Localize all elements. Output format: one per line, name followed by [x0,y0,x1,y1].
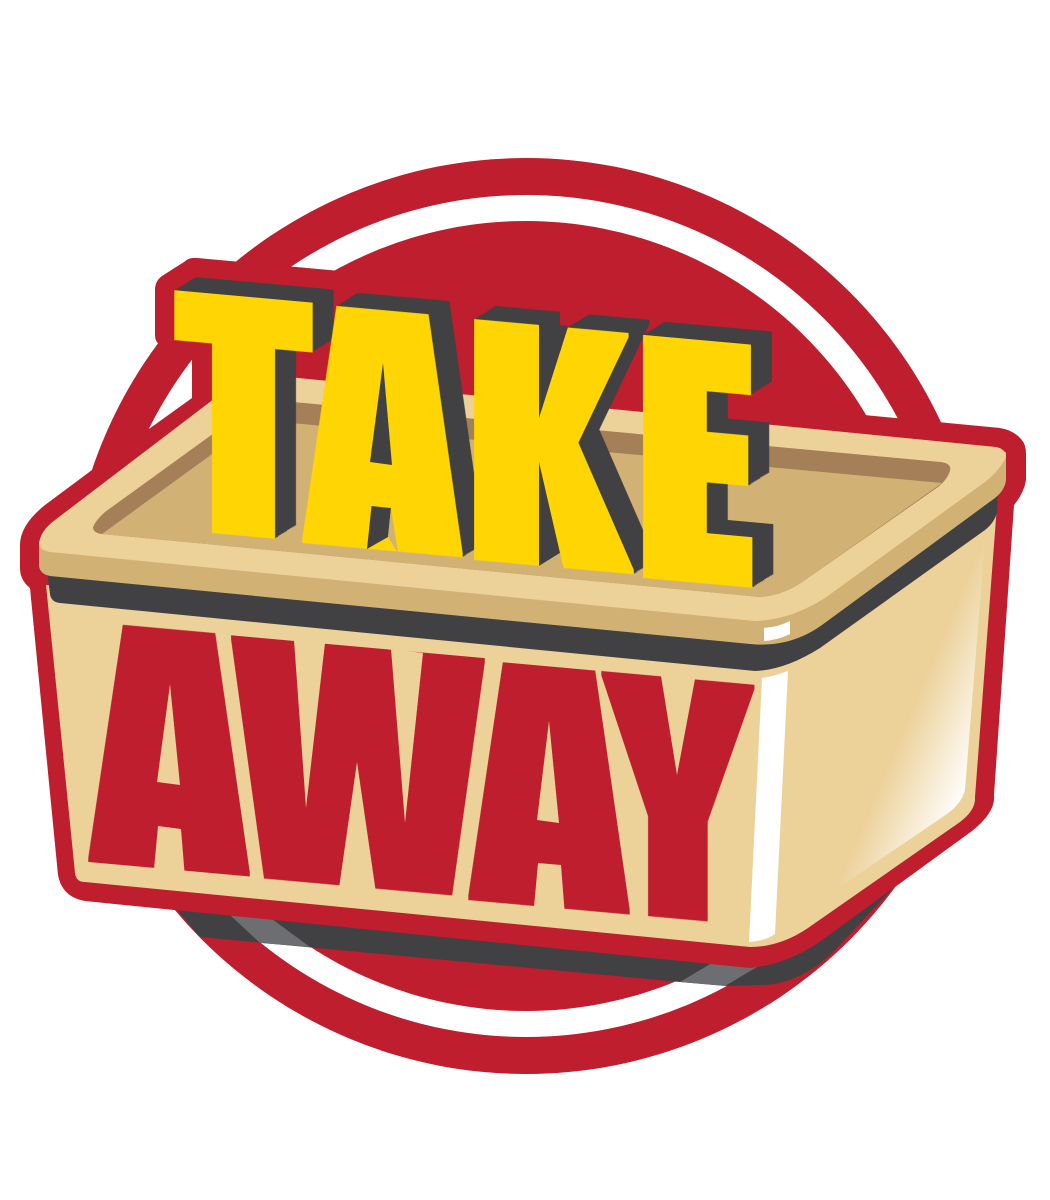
word: TAKE: T [190,230,297,615]
box lid [39,373,1006,645]
take away logo [20,158,1026,1074]
lid recess [102,420,942,597]
lid top rim [39,373,1006,621]
word: AWAY: A [500,601,599,987]
word: TAKE [190,230,744,663]
white highlight stripe [749,671,788,942]
red outline around box and title [20,258,1026,968]
lid highlight [764,621,790,641]
word: AWAY: Y [614,610,741,1000]
lid inner shadow [93,399,950,597]
word: TAKE: E [649,273,744,663]
box body [46,505,997,947]
word: TAKE: A [334,245,431,630]
word: AWAY: A [120,563,219,949]
background circle badge [68,158,984,1074]
word: AWAY: W [253,574,463,971]
box drop shadow [177,889,892,986]
glossy shine on box side [825,540,985,897]
lid underside shadow [47,490,998,671]
word: TAKE: K [489,259,606,647]
word: AWAY [120,562,741,1000]
